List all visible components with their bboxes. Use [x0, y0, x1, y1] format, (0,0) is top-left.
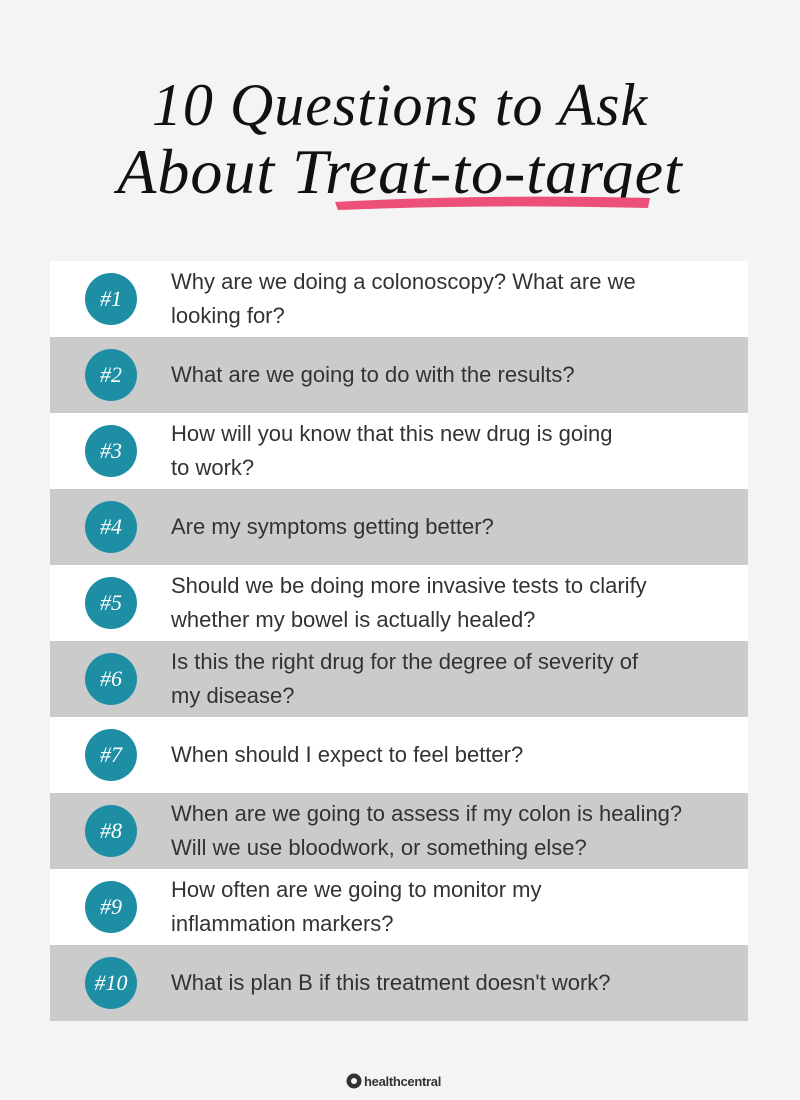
title: 10 Questions to Ask	[152, 72, 648, 138]
row 9: #9	[100, 894, 122, 919]
row 8: When are we going to assess if my colon is healing?	[171, 801, 682, 826]
row 10	[50, 945, 748, 1021]
row 2: What are we going to do with the results?	[171, 362, 575, 387]
row 6: #6	[100, 666, 122, 691]
row 2	[50, 337, 748, 413]
row 8: #8	[100, 818, 122, 843]
row 9: How often are we going to monitor my	[171, 877, 542, 902]
row 7: #7	[100, 742, 122, 767]
question list	[50, 261, 748, 1021]
row 10: #10	[94, 970, 128, 995]
row 1: Why are we doing a colonoscopy? What are we	[171, 269, 636, 294]
row 9: inflammation markers?	[171, 911, 394, 936]
row 1: looking for?	[171, 303, 285, 328]
row 5: #5	[100, 590, 122, 615]
row 4	[50, 489, 748, 565]
row 2: #2	[100, 362, 122, 387]
pink underline brushstroke	[335, 196, 650, 210]
logo: healthcentral: healthcentral	[364, 1074, 441, 1088]
row 6	[50, 641, 748, 717]
row 8: Will we use bloodwork, or something else?	[171, 835, 587, 860]
row 3: to work?	[171, 455, 254, 480]
row 5: Should we be doing more invasive tests to clarify	[171, 573, 647, 598]
title: About Treat-to-target	[117, 136, 683, 207]
row 5	[50, 565, 748, 641]
row 1: #1	[100, 286, 122, 311]
row 6: Is this the right drug for the degree of severity of	[171, 649, 638, 674]
row 3	[50, 413, 748, 489]
row 10: What is plan B if this treatment doesn't work?	[171, 970, 611, 995]
row 7: When should I expect to feel better?	[171, 742, 523, 767]
row 7	[50, 717, 748, 793]
row 1	[50, 261, 748, 337]
row 4: Are my symptoms getting better?	[171, 514, 494, 539]
row 6: my disease?	[171, 683, 295, 708]
row 4: #4	[100, 514, 122, 539]
row 3: How will you know that this new drug is going	[171, 421, 612, 446]
row 5: whether my bowel is actually healed?	[171, 607, 535, 632]
row 9	[50, 869, 748, 945]
row 3: #3	[100, 438, 122, 463]
row 8	[50, 793, 748, 869]
title	[114, 72, 684, 210]
